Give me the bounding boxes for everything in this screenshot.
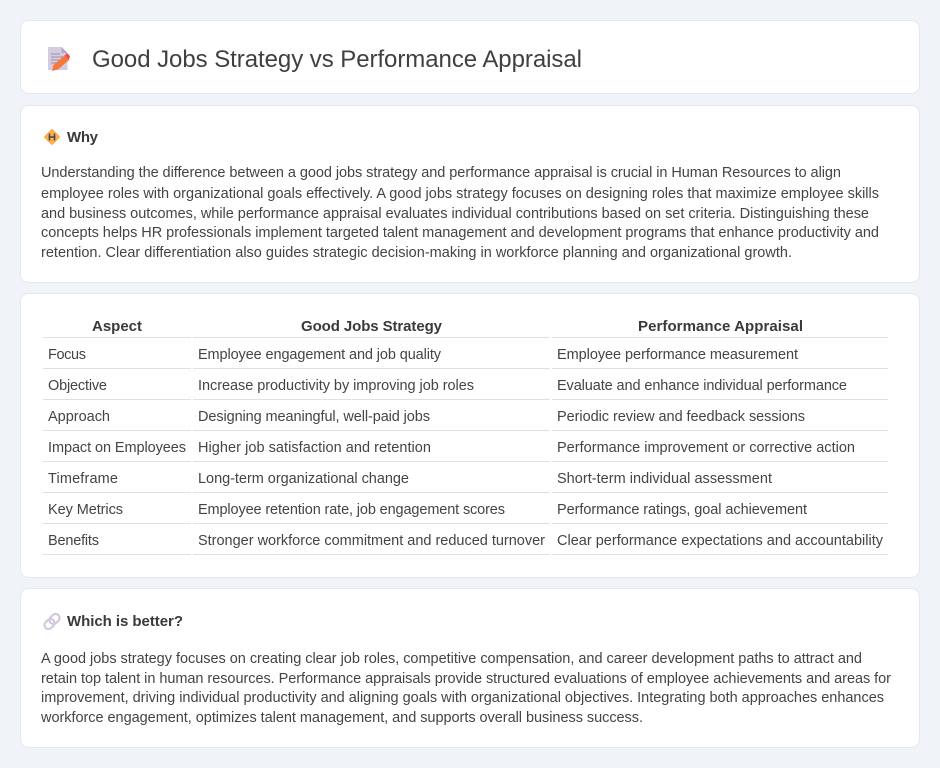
row: key metrics: Key Metrics (48, 502, 123, 518)
heading: which is better: Which is better? (67, 613, 183, 630)
row: approach: Approach (48, 409, 110, 425)
text block: which is better paragraph: workforce engagement, optimizes talent management, and supports overall business success. (40, 710, 643, 726)
row: impact on employees: Higher job satisfaction and retention (198, 440, 431, 456)
icon: link (43, 612, 61, 631)
text block: which is better paragraph: improvement, driving individual productivity and aligning goals with organizational objectives. Integrating both approaches enhances (41, 690, 884, 706)
panel: why (20, 106, 920, 282)
row: benefits: Clear performance expectations and accountability (557, 533, 884, 549)
table header row: Good Jobs Strategy (301, 318, 443, 335)
panel: which is better (20, 588, 920, 748)
panel: header (20, 20, 920, 94)
row: impact on employees: Impact on Employees (48, 440, 186, 456)
row: timeframe (48, 471, 772, 487)
table header row (92, 318, 803, 335)
heading: why: Why (67, 129, 99, 146)
panel: comparison table (20, 294, 920, 578)
row: key metrics: Employee retention rate, job engagement scores (198, 502, 505, 518)
row: objective: Increase productivity by improving job roles (198, 378, 474, 394)
table header row: Performance Appraisal (638, 318, 803, 335)
row: objective: Objective (48, 378, 107, 394)
row: approach: Designing meaningful, well-paid jobs (198, 409, 430, 425)
row: benefits (48, 533, 884, 549)
row: timeframe: Long-term organizational change (198, 471, 409, 487)
row: approach (48, 409, 805, 425)
text block: why paragraph: and business outcomes, while performance appraisal evaluates individual contributions based on set criteria. Distinguishing these (41, 206, 869, 222)
row: objective: Evaluate and enhance individual performance (557, 378, 847, 394)
icon: document with pencil (48, 47, 70, 71)
text block: why paragraph: retention. Clear differentiation also guides strategic decision-making in workforce planning and organizational growth. (41, 245, 792, 261)
row: benefits: Benefits (48, 533, 99, 549)
row: impact on employees: Performance improvement or corrective action (557, 440, 855, 456)
text block: which is better paragraph: A good jobs strategy focuses on creating clear job roles, competitive compensation, and career development paths to attract and (41, 651, 862, 667)
row: focus: Focus (48, 347, 86, 363)
row: benefits: Stronger workforce commitment and reduced turnover (198, 533, 545, 549)
row: focus (48, 347, 798, 363)
row: objective (48, 378, 847, 394)
row: key metrics: Performance ratings, goal achievement (557, 502, 807, 518)
icon: warning diamond (44, 129, 60, 145)
text block: why paragraph: concepts helps HR professionals implement targeted talent management and development programs that enhance productivity and (41, 225, 879, 241)
table header row: Aspect (92, 318, 142, 335)
title: Good Jobs Strategy vs Performance Appraisal (92, 46, 582, 73)
row: key metrics (48, 502, 807, 518)
text block: why paragraph (41, 165, 879, 261)
row: timeframe: Short-term individual assessment (557, 471, 772, 487)
text block: why paragraph: Understanding the difference between a good jobs strategy and performance appraisal is crucial in Human Resources to align (41, 165, 841, 181)
text block: which is better paragraph (40, 651, 891, 726)
row: timeframe: Timeframe (48, 471, 118, 487)
row: impact on employees (48, 440, 855, 456)
text block: which is better paragraph: retain top talent in human resources. Performance appraisals provide structured evaluations of employee achievements and areas for (41, 671, 891, 687)
row: focus: Employee engagement and job quality (198, 347, 442, 363)
text block: why paragraph: employee roles with organizational goals effectively. A good jobs strategy focuses on designing roles that maximize employee skills (41, 186, 879, 202)
row: approach: Periodic review and feedback sessions (557, 409, 805, 425)
row: focus: Employee performance measurement (557, 347, 798, 363)
